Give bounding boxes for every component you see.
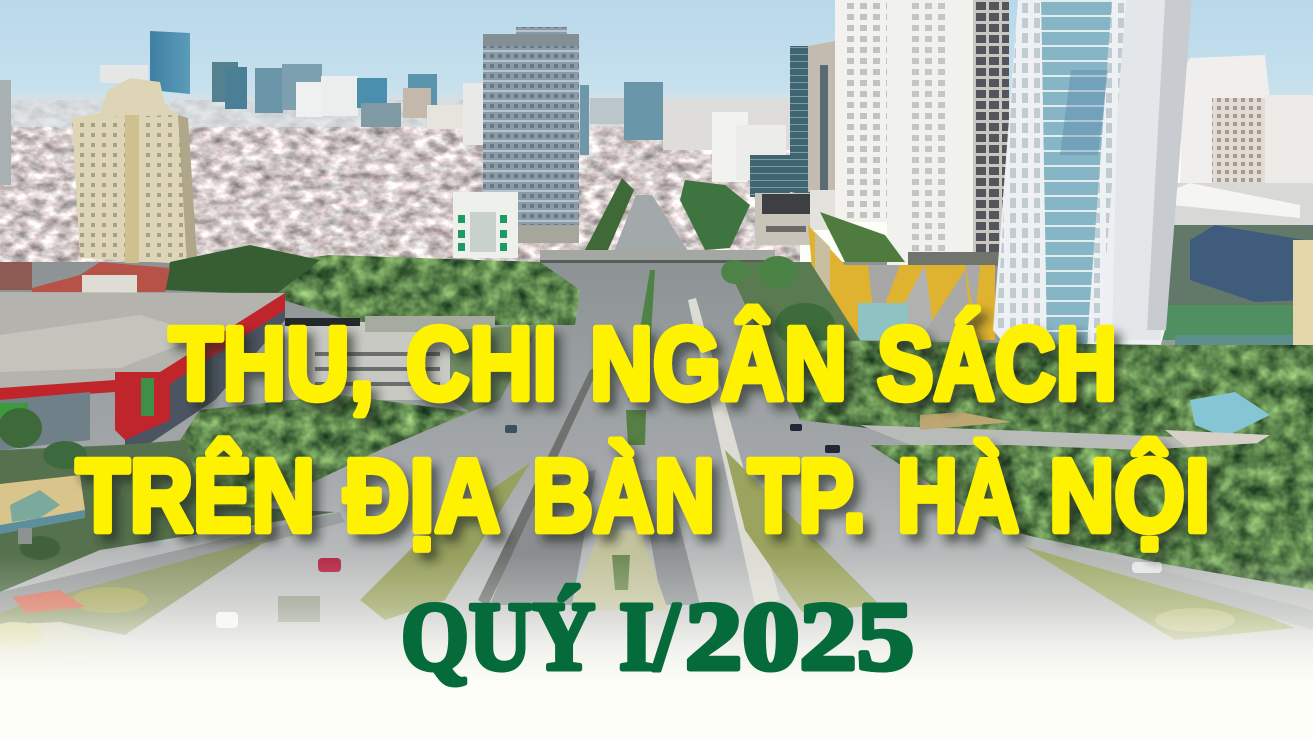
title line 1: NGÂN — [590, 306, 847, 421]
subtitle: period — [401, 583, 914, 691]
title line 1: THU, — [169, 306, 374, 421]
red roof villas — [0, 262, 170, 293]
far avenue and overpass — [540, 195, 775, 263]
mid towers behind the avenue — [750, 40, 840, 245]
street trees on both sides — [585, 178, 860, 420]
tree park — [165, 245, 585, 330]
glass curved skyscraper — [993, 0, 1192, 400]
left roadside trees — [0, 390, 475, 592]
billboard — [0, 475, 85, 544]
title — [76, 306, 1210, 553]
title line 1: SÁCH — [877, 306, 1117, 421]
white and green building — [453, 192, 518, 258]
bottom white fade — [0, 555, 1313, 685]
grey glass tower — [483, 27, 579, 243]
left lower road and grass — [0, 512, 345, 672]
beige apartment tower — [72, 78, 197, 264]
title line 2: TP. — [748, 438, 866, 553]
yellow shopping mall — [808, 212, 995, 340]
title line 2: HÀ — [897, 438, 1019, 553]
right-side gardens and pool — [795, 335, 1313, 640]
white twin residential tower — [835, 0, 1009, 266]
title line 1: CHI — [406, 306, 557, 421]
title line 2 — [76, 437, 1210, 553]
subtitle: period: I/ — [619, 583, 681, 691]
right grass median — [725, 450, 880, 612]
title line 2: TRÊN — [76, 437, 315, 553]
subtitle: period: 2025 — [685, 583, 914, 691]
title line 2: NỘI — [1049, 438, 1210, 553]
distant towers — [0, 31, 793, 185]
parking deck — [285, 316, 540, 412]
right skyline far towers — [1163, 55, 1313, 400]
sky — [0, 0, 1313, 140]
right road strip — [985, 532, 1313, 630]
title line 2: ĐỊA — [344, 438, 500, 553]
title line 2: BÀN — [532, 438, 715, 553]
subtitle: period: QUÝ — [401, 583, 595, 691]
central concrete divider and lanes — [478, 270, 780, 610]
city skyline: dense low-rise district — [0, 95, 800, 270]
ground: avenue surface — [0, 262, 1313, 682]
centre-left grass median — [360, 463, 530, 620]
Lotte shopping centre — [0, 292, 285, 450]
title line 1 — [169, 306, 1117, 421]
vehicles — [216, 424, 1162, 628]
